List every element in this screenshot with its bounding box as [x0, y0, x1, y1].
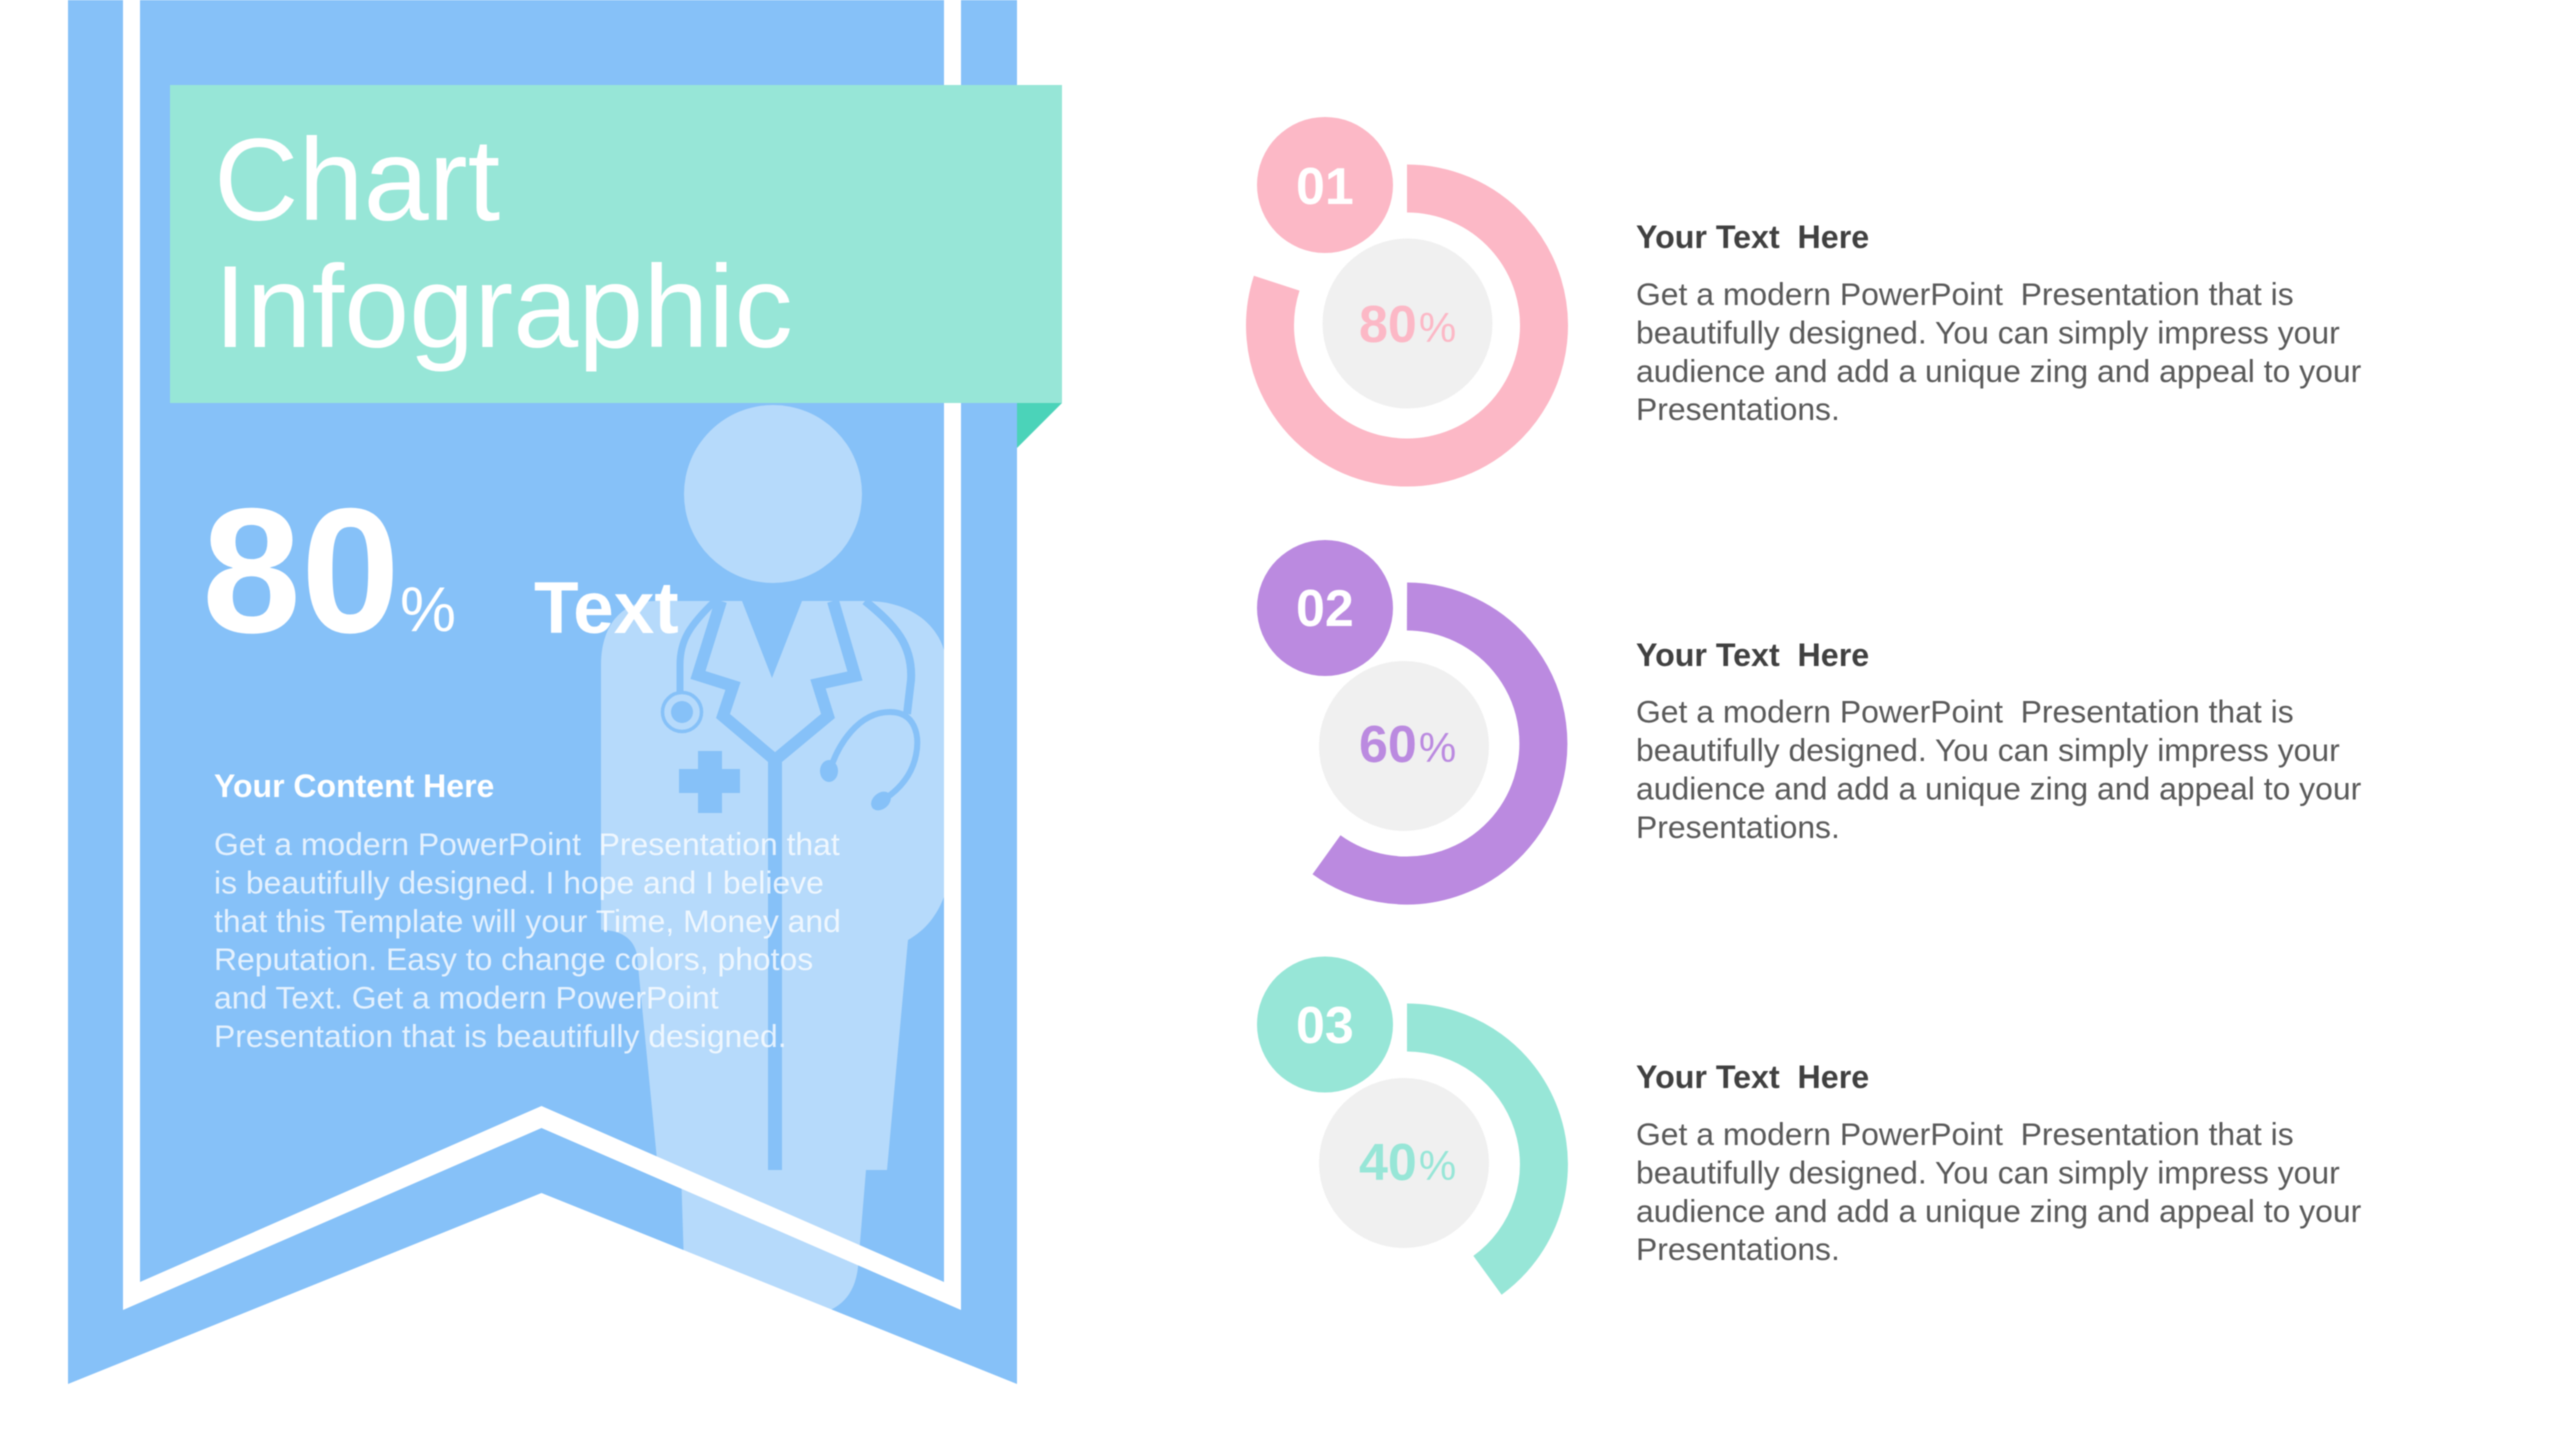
text block: item 2: beautifully designed. You can simply impress your [1636, 732, 2340, 768]
text block: your content: Presentation that is beautifully designed. [214, 1018, 787, 1054]
big stat: 80% Text: % [400, 575, 456, 645]
chart: donut 60% [1319, 606, 1543, 880]
text block: item 1: beautifully designed. You can simply impress your [1636, 314, 2340, 350]
badge: 02 [1257, 540, 1393, 676]
badge: 03 [1257, 956, 1393, 1092]
chart: donut 80%: 80% [1359, 296, 1456, 354]
big stat: 80% Text: Text [534, 568, 679, 649]
text block: item 2: Get a modern PowerPoint Presentation that is [1636, 694, 2294, 730]
text block: item 2 [1636, 637, 2362, 845]
text block: your content: Your Content Here [214, 768, 494, 804]
chart: donut 40% [1319, 1028, 1544, 1275]
text block: item 1: audience and add a unique zing and appeal to your [1636, 353, 2362, 389]
text block: your content: and Text. Get a modern PowerPoint [214, 980, 719, 1016]
chart: donut 80% [1270, 188, 1544, 463]
panel: title band [170, 85, 1062, 403]
text block: item 3: beautifully designed. You can simply impress your [1636, 1154, 2340, 1190]
text block: item 3: audience and add a unique zing and appeal to your [1636, 1193, 2362, 1229]
text block: your content: Get a modern PowerPoint Presentation that [214, 826, 840, 862]
text block: item 3 [1636, 1059, 2362, 1267]
white ribbon inset stroke [123, 0, 961, 1310]
badge: 02: 02 [1296, 580, 1354, 638]
big stat: 80% Text [202, 471, 679, 670]
text block: item 3: Get a modern PowerPoint Presentation that is [1636, 1116, 2294, 1152]
title [214, 114, 793, 372]
text block: your content [214, 768, 841, 1054]
badge: 01: 01 [1296, 158, 1354, 216]
text block: item 3: Your Text Here [1636, 1059, 1869, 1095]
big stat: 80% Text: 80 [202, 471, 400, 670]
text block: item 1: Your Text Here [1636, 219, 1869, 255]
badge: 01 [1257, 117, 1393, 253]
text block: item 2: Presentations. [1636, 809, 1840, 845]
text block: item 1: Get a modern PowerPoint Presentation that is [1636, 276, 2294, 312]
chart: donut 40%: 40% [1359, 1134, 1456, 1192]
title: Infographic [214, 241, 793, 372]
icon: teal ribbon fold [1017, 403, 1062, 448]
text block: item 1 [1636, 219, 2362, 427]
icon: doctor silhouette [601, 405, 944, 1315]
text block: your content: that this Template will your Time, Money and [214, 903, 841, 939]
text block: your content: is beautifully designed. I hope and I believe [214, 864, 824, 900]
text block: item 1: Presentations. [1636, 391, 1840, 427]
title: Chart [214, 114, 500, 245]
text block: item 3: Presentations. [1636, 1231, 1840, 1267]
panel: blue ribbon banner [68, 0, 1017, 1384]
text block: item 2: audience and add a unique zing and appeal to your [1636, 770, 2362, 806]
chart: donut 60%: 60% [1359, 716, 1456, 774]
text block: your content: Reputation. Easy to change colors, photos [214, 941, 813, 977]
text block: item 2: Your Text Here [1636, 637, 1869, 673]
badge: 03: 03 [1296, 997, 1354, 1055]
